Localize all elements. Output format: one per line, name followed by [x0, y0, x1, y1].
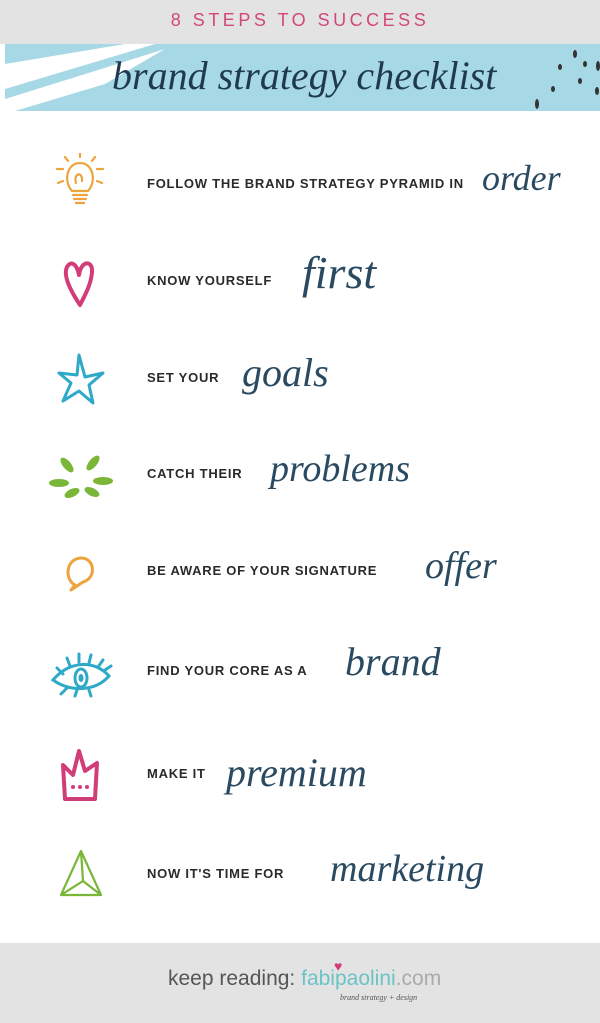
step 6: [50, 639, 441, 698]
script word: problems: problems: [270, 448, 410, 490]
script word: marketing: marketing: [330, 848, 484, 890]
text: step 3: SET YOUR: [147, 370, 219, 385]
footer band: [0, 943, 600, 1023]
subtitle: 8 STEPS TO SUCCESS: [171, 10, 429, 30]
step 5: [66, 545, 497, 592]
footer text: keep reading: fabipaolini.com: [168, 967, 441, 990]
script word: order: order: [482, 158, 561, 198]
script word: brand: brand: [345, 639, 441, 684]
script word: premium: premium: [226, 750, 367, 795]
script word: offer: offer: [425, 545, 497, 587]
text: step 6: FIND YOUR CORE AS A: [147, 663, 307, 678]
step 4: [49, 448, 410, 498]
icon: pyramid: [60, 850, 102, 896]
footer tagline: brand strategy + design: [340, 993, 417, 1002]
header gray band: [0, 0, 600, 44]
script word: goals: goals: [242, 350, 329, 395]
step 3: [57, 350, 329, 404]
icon: light bulb: [56, 153, 104, 204]
text: step 2: KNOW YOURSELF: [147, 273, 272, 288]
icon: heart: [64, 261, 94, 308]
icon: speech bubble: [66, 556, 94, 592]
icon: logo heart: ♥: [334, 958, 342, 974]
text: step 7: MAKE IT: [147, 766, 206, 781]
icon: eye: [50, 652, 113, 698]
icon: leaves: [49, 456, 113, 498]
step 7: [61, 749, 367, 801]
script word: first: first: [302, 247, 376, 298]
text: step 5: BE AWARE OF YOUR SIGNATURE: [147, 563, 377, 578]
text: step 1: FOLLOW THE BRAND STRATEGY PYRAMID IN: [147, 176, 464, 191]
icon: crown: [61, 749, 99, 801]
title: brand strategy checklist: [112, 53, 496, 98]
step 1: [56, 153, 561, 204]
step 8: [60, 848, 484, 896]
step 2: [64, 247, 378, 308]
text: step 4: CATCH THEIR: [147, 466, 242, 481]
title banner: [5, 44, 600, 111]
text: step 8: NOW IT'S TIME FOR: [147, 866, 284, 881]
icon: star: [57, 354, 104, 404]
